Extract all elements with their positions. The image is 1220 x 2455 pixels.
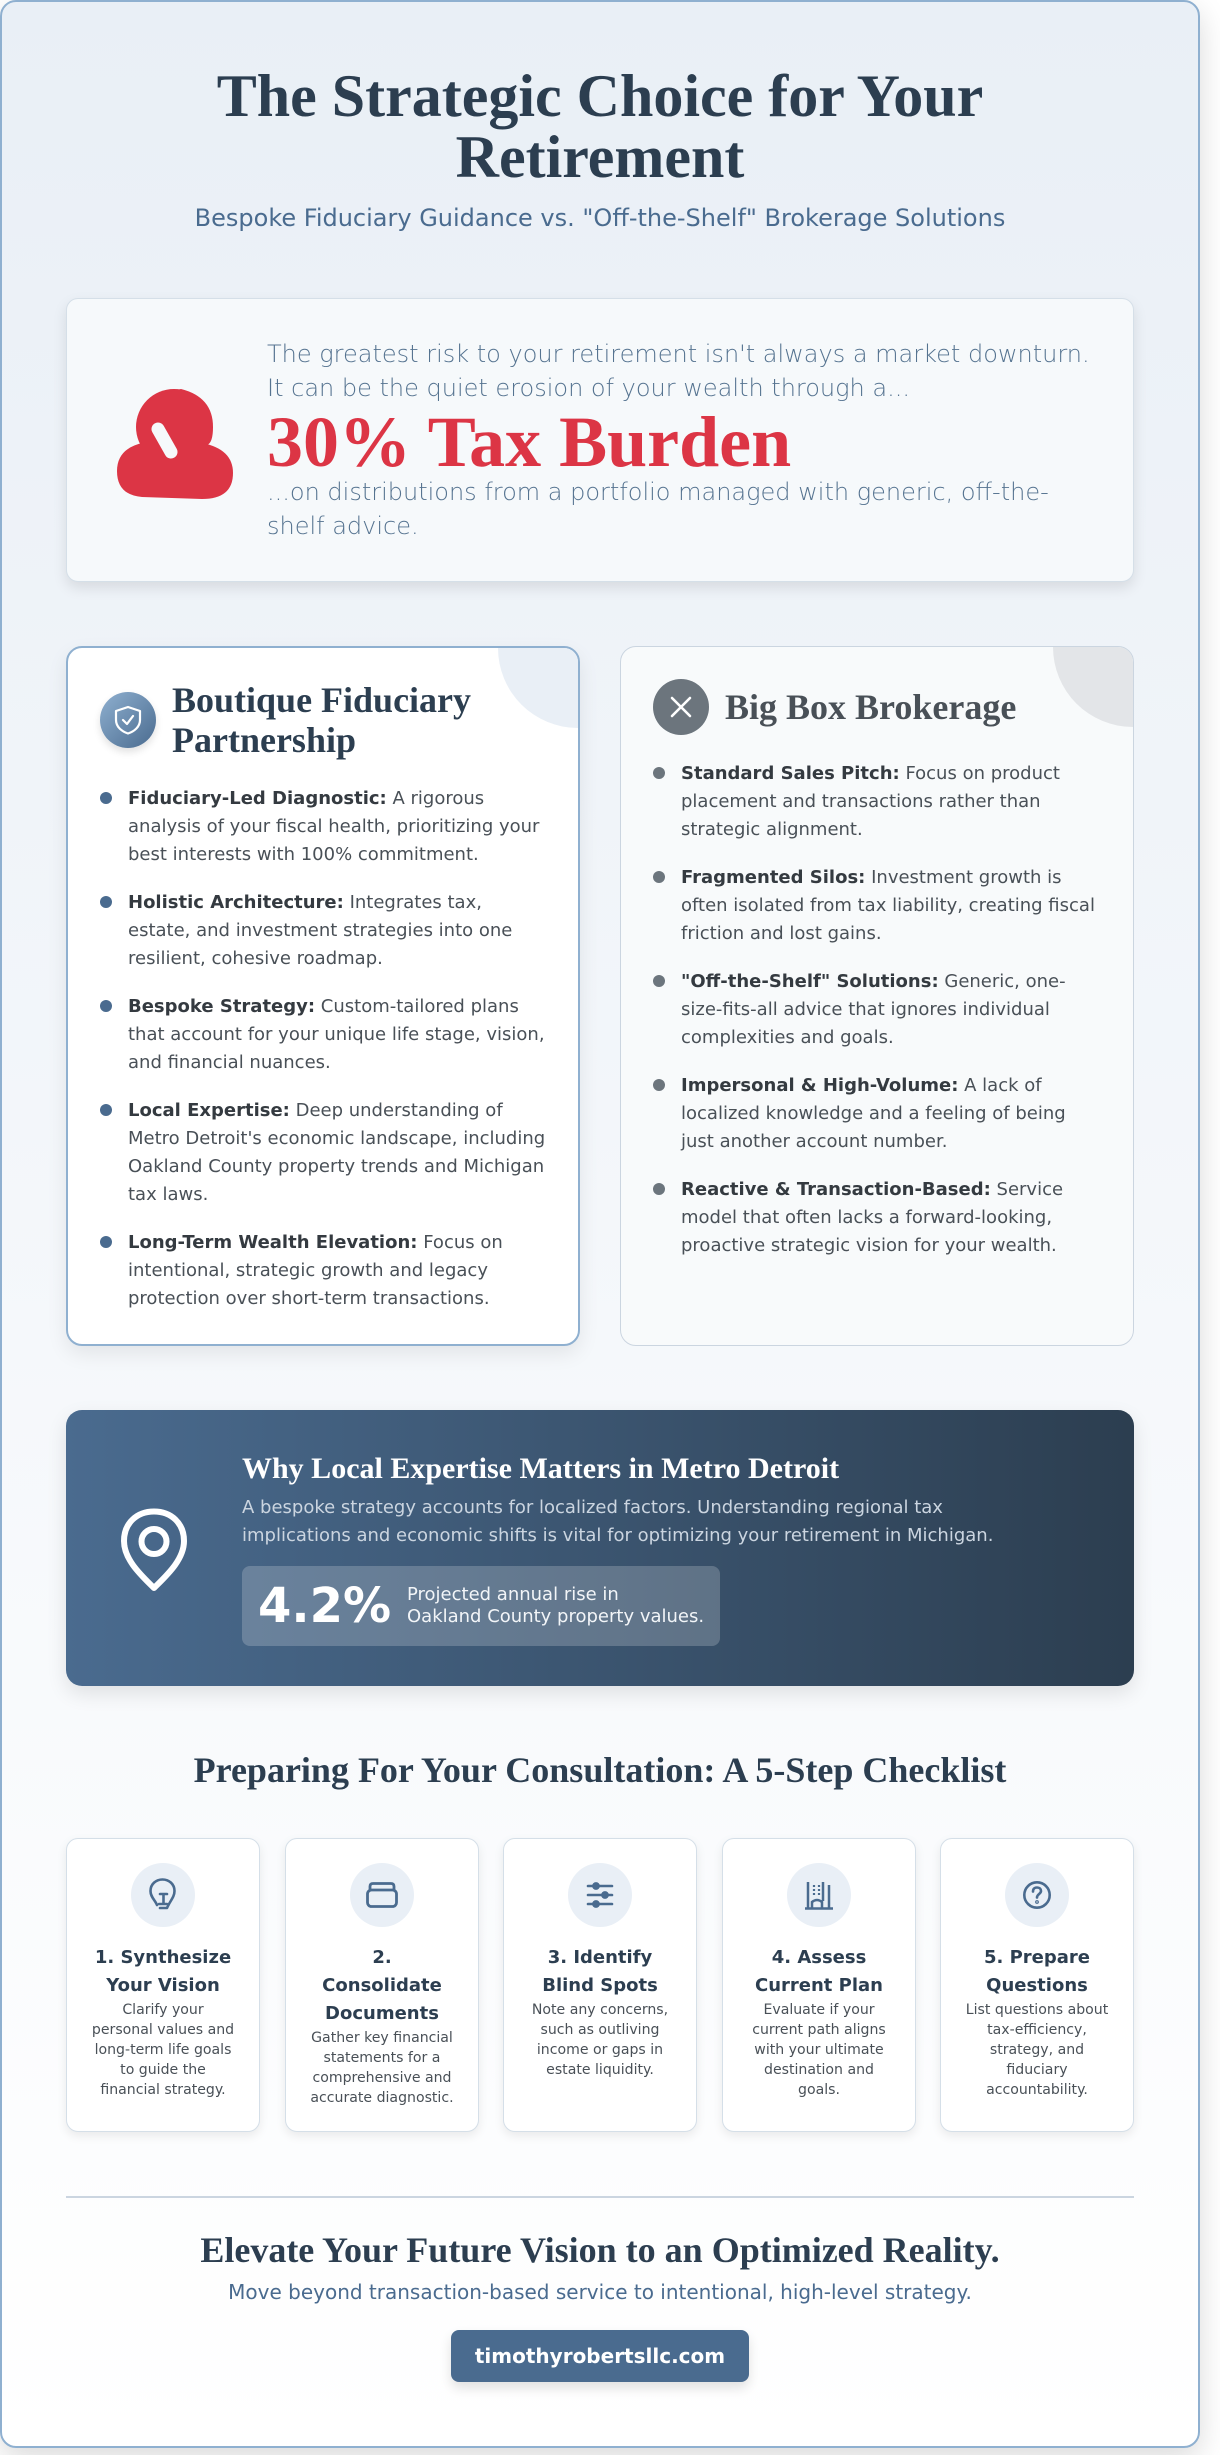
text: call to action: Move beyond transaction-based service to intentional, high-level strategy. bbox=[228, 2280, 972, 2304]
step text: to guide the bbox=[120, 2062, 206, 2078]
heading: boutique fiduciary: Partnership bbox=[172, 720, 356, 760]
text: local expertise description: implications and economic shifts is vital for optimizing your retirement in Michigan. bbox=[242, 1525, 993, 1546]
bullet: off-the-shelf solutions: "Off-the-Shelf" Solutions: Generic, one- bbox=[681, 971, 1066, 992]
bullet: holistic architecture: resilient, cohesive roadmap. bbox=[128, 948, 383, 969]
step text: fiduciary bbox=[1006, 2062, 1068, 2078]
step text bbox=[92, 2002, 234, 2098]
title bbox=[217, 63, 983, 190]
icon: location pin bbox=[121, 1508, 187, 1591]
bullet: standard sales pitch: Standard Sales Pitch: Focus on product bbox=[681, 763, 1060, 784]
heading: boutique fiduciary: Boutique Fiduciary bbox=[172, 680, 471, 720]
checklist card 1 bbox=[66, 1838, 260, 2132]
hero statistic: 30% Tax Burden bbox=[267, 402, 791, 482]
icon: question circle bbox=[1005, 1863, 1069, 1927]
icon: lightbulb bbox=[131, 1863, 195, 1927]
icon: sliders bbox=[568, 1863, 632, 1927]
bullet: long-term wealth elevation: intentional, strategic growth and legacy bbox=[128, 1260, 488, 1281]
bullet: impersonal and high-volume: just another account number. bbox=[681, 1131, 947, 1152]
text: local expertise description: A bespoke strategy accounts for localized factors. Understanding regional tax bbox=[242, 1497, 943, 1518]
bullet: fragmented silos: Fragmented Silos: Investment growth is bbox=[681, 867, 1062, 888]
step title: Blind Spots bbox=[542, 1975, 658, 1996]
bullet: long-term wealth elevation: protection over short-term transactions. bbox=[128, 1288, 490, 1309]
bullet: impersonal and high-volume bbox=[653, 1075, 1066, 1152]
step title: Consolidate bbox=[322, 1975, 442, 1996]
step text: current path aligns bbox=[752, 2022, 886, 2038]
bullet: standard sales pitch: strategic alignment. bbox=[681, 819, 863, 840]
step text: such as outliving bbox=[541, 2022, 659, 2038]
step title bbox=[95, 1947, 231, 1996]
bullet: fiduciary-led diagnostic bbox=[100, 788, 540, 865]
icon: red warning blob bbox=[117, 389, 233, 499]
step text: destination and bbox=[764, 2062, 874, 2078]
bullet: holistic architecture bbox=[100, 892, 512, 969]
step text: accurate diagnostic. bbox=[310, 2090, 454, 2106]
hero intro text: The greatest risk to your retirement isn't always a market downturn. bbox=[267, 340, 1090, 368]
step text: tax-efficiency, bbox=[987, 2022, 1087, 2038]
step title: Current Plan bbox=[755, 1975, 883, 1996]
bullet: standard sales pitch bbox=[653, 763, 1060, 840]
bullet: local expertise: tax laws. bbox=[128, 1184, 208, 1205]
hero closing text: ...on distributions from a portfolio managed with generic, off-the- bbox=[267, 478, 1049, 506]
step text: estate liquidity. bbox=[546, 2062, 654, 2078]
panel: tax burden hero bbox=[66, 298, 1134, 582]
bullet: reactive and transaction-based: Reactive & Transaction-Based: Service bbox=[681, 1179, 1063, 1200]
icon: x mark bbox=[653, 679, 709, 735]
hero closing text: shelf advice. bbox=[267, 512, 419, 540]
bullet: bespoke strategy bbox=[100, 996, 545, 1073]
step text: goals. bbox=[798, 2082, 840, 2098]
bullet: impersonal and high-volume: Impersonal & High-Volume: A lack of bbox=[681, 1075, 1042, 1096]
step title: 3. Identify bbox=[548, 1947, 652, 1968]
checklist card 5 bbox=[940, 1838, 1134, 2132]
bullet: reactive and transaction-based bbox=[653, 1179, 1063, 1256]
bullet: impersonal and high-volume: localized knowledge and a feeling of being bbox=[681, 1103, 1066, 1124]
step text: Clarify your bbox=[122, 2002, 204, 2018]
bullet: fragmented silos: often isolated from tax liability, creating fiscal bbox=[681, 895, 1095, 916]
step text: with your ultimate bbox=[754, 2042, 884, 2058]
step text: income or gaps in bbox=[537, 2042, 663, 2058]
bullet: bespoke strategy: Bespoke Strategy: Custom-tailored plans bbox=[128, 996, 519, 1017]
icon: wallet bbox=[350, 1863, 414, 1927]
list: boutique fiduciary points bbox=[100, 788, 545, 1309]
step text bbox=[310, 2030, 454, 2106]
step title bbox=[984, 1947, 1090, 1996]
heading: call to action: Elevate Your Future Vision to an Optimized Reality. bbox=[200, 2230, 1000, 2270]
bullet: fiduciary-led diagnostic: analysis of your fiscal health, prioritizing your bbox=[128, 816, 539, 837]
title: The Strategic Choice for Your bbox=[217, 63, 983, 129]
button: website bbox=[451, 2330, 749, 2382]
step text bbox=[752, 2002, 886, 2098]
hero intro text bbox=[267, 340, 1090, 402]
hero intro text: It can be the quiet erosion of your wealth through a... bbox=[267, 374, 910, 402]
checklist card 3 bbox=[503, 1838, 697, 2132]
step text: statements for a bbox=[324, 2050, 440, 2066]
step title: 5. Prepare bbox=[984, 1947, 1090, 1968]
step text: personal values and bbox=[92, 2022, 234, 2038]
bullet: off-the-shelf solutions: complexities and goals. bbox=[681, 1027, 894, 1048]
step title: Documents bbox=[325, 2003, 439, 2024]
step title: 2. bbox=[372, 1947, 392, 1968]
heading: checklist: Preparing For Your Consultation: A 5-Step Checklist bbox=[194, 1750, 1006, 1790]
bullet: long-term wealth elevation: Long-Term Wealth Elevation: Focus on bbox=[128, 1232, 503, 1253]
bullet: local expertise: Metro Detroit's economic landscape, including bbox=[128, 1128, 545, 1149]
list: big box points bbox=[653, 763, 1095, 1256]
heading: local expertise: Why Local Expertise Matters in Metro Detroit bbox=[242, 1452, 839, 1485]
step title: Questions bbox=[986, 1975, 1088, 1996]
step text: financial strategy. bbox=[100, 2082, 226, 2098]
bullet: off-the-shelf solutions bbox=[653, 971, 1066, 1048]
bullet: off-the-shelf solutions: size-fits-all advice that ignores individual bbox=[681, 999, 1050, 1020]
step title: Your Vision bbox=[106, 1975, 220, 1996]
step title: 1. Synthesize bbox=[95, 1947, 231, 1968]
bullet: standard sales pitch: placement and transactions rather than bbox=[681, 791, 1041, 812]
heading: big box brokerage: Big Box Brokerage bbox=[725, 687, 1016, 727]
step text: accountability. bbox=[986, 2082, 1088, 2098]
stat value: 4.2% bbox=[258, 1578, 391, 1634]
step title bbox=[322, 1947, 442, 2024]
icon: building bbox=[787, 1863, 851, 1927]
panel: big box brokerage bbox=[620, 646, 1134, 1346]
stat caption: Oakland County property values. bbox=[407, 1606, 704, 1627]
bullet: fiduciary-led diagnostic: best interests with 100% commitment. bbox=[128, 844, 479, 865]
bullet: bespoke strategy: and financial nuances. bbox=[128, 1052, 331, 1073]
text: local expertise description bbox=[242, 1497, 993, 1546]
step text bbox=[532, 2002, 668, 2078]
bullet: bespoke strategy: that account for your unique life stage, vision, bbox=[128, 1024, 545, 1045]
subtitle: Bespoke Fiduciary Guidance vs. "Off-the-Shelf" Brokerage Solutions bbox=[195, 204, 1005, 232]
stat box: property values bbox=[242, 1566, 720, 1646]
bullet: reactive and transaction-based: model that often lacks a forward-looking, bbox=[681, 1207, 1052, 1228]
step text: strategy, and bbox=[990, 2042, 1084, 2058]
bullet: local expertise: Local Expertise: Deep understanding of bbox=[128, 1100, 503, 1121]
step title: 4. Assess bbox=[772, 1947, 866, 1968]
title: Retirement bbox=[456, 124, 744, 190]
step text: long-term life goals bbox=[95, 2042, 231, 2058]
step title bbox=[755, 1947, 883, 1996]
bullet: holistic architecture: Holistic Architecture: Integrates tax, bbox=[128, 892, 482, 913]
heading: boutique fiduciary bbox=[172, 680, 471, 760]
bullet: local expertise: Oakland County property trends and Michigan bbox=[128, 1156, 544, 1177]
step text: Evaluate if your bbox=[763, 2002, 875, 2018]
step text: Note any concerns, bbox=[532, 2002, 668, 2018]
hero closing text bbox=[267, 478, 1049, 540]
step text: comprehensive and bbox=[312, 2070, 452, 2086]
bullet: fragmented silos bbox=[653, 867, 1095, 944]
bullet: fiduciary-led diagnostic: Fiduciary-Led Diagnostic: A rigorous bbox=[128, 788, 484, 809]
step text bbox=[966, 2002, 1108, 2098]
bullet: long-term wealth elevation bbox=[100, 1232, 503, 1309]
bullet: fragmented silos: friction and lost gains. bbox=[681, 923, 882, 944]
checklist card 4 bbox=[722, 1838, 916, 2132]
bullet: local expertise bbox=[100, 1100, 545, 1205]
checklist card 2 bbox=[285, 1838, 479, 2132]
bullet: reactive and transaction-based: proactive strategic vision for your wealth. bbox=[681, 1235, 1057, 1256]
panel: boutique fiduciary bbox=[66, 646, 580, 1346]
step text: Gather key financial bbox=[311, 2030, 453, 2046]
stat caption: Projected annual rise in bbox=[407, 1584, 619, 1605]
step title bbox=[542, 1947, 658, 1996]
button: website: timothyrobertsllc.com bbox=[475, 2344, 725, 2368]
stat caption bbox=[407, 1584, 704, 1627]
bullet: holistic architecture: estate, and investment strategies into one bbox=[128, 920, 512, 941]
icon: shield check bbox=[100, 692, 156, 748]
step text: List questions about bbox=[966, 2002, 1108, 2018]
panel: local expertise band bbox=[66, 1410, 1134, 1686]
